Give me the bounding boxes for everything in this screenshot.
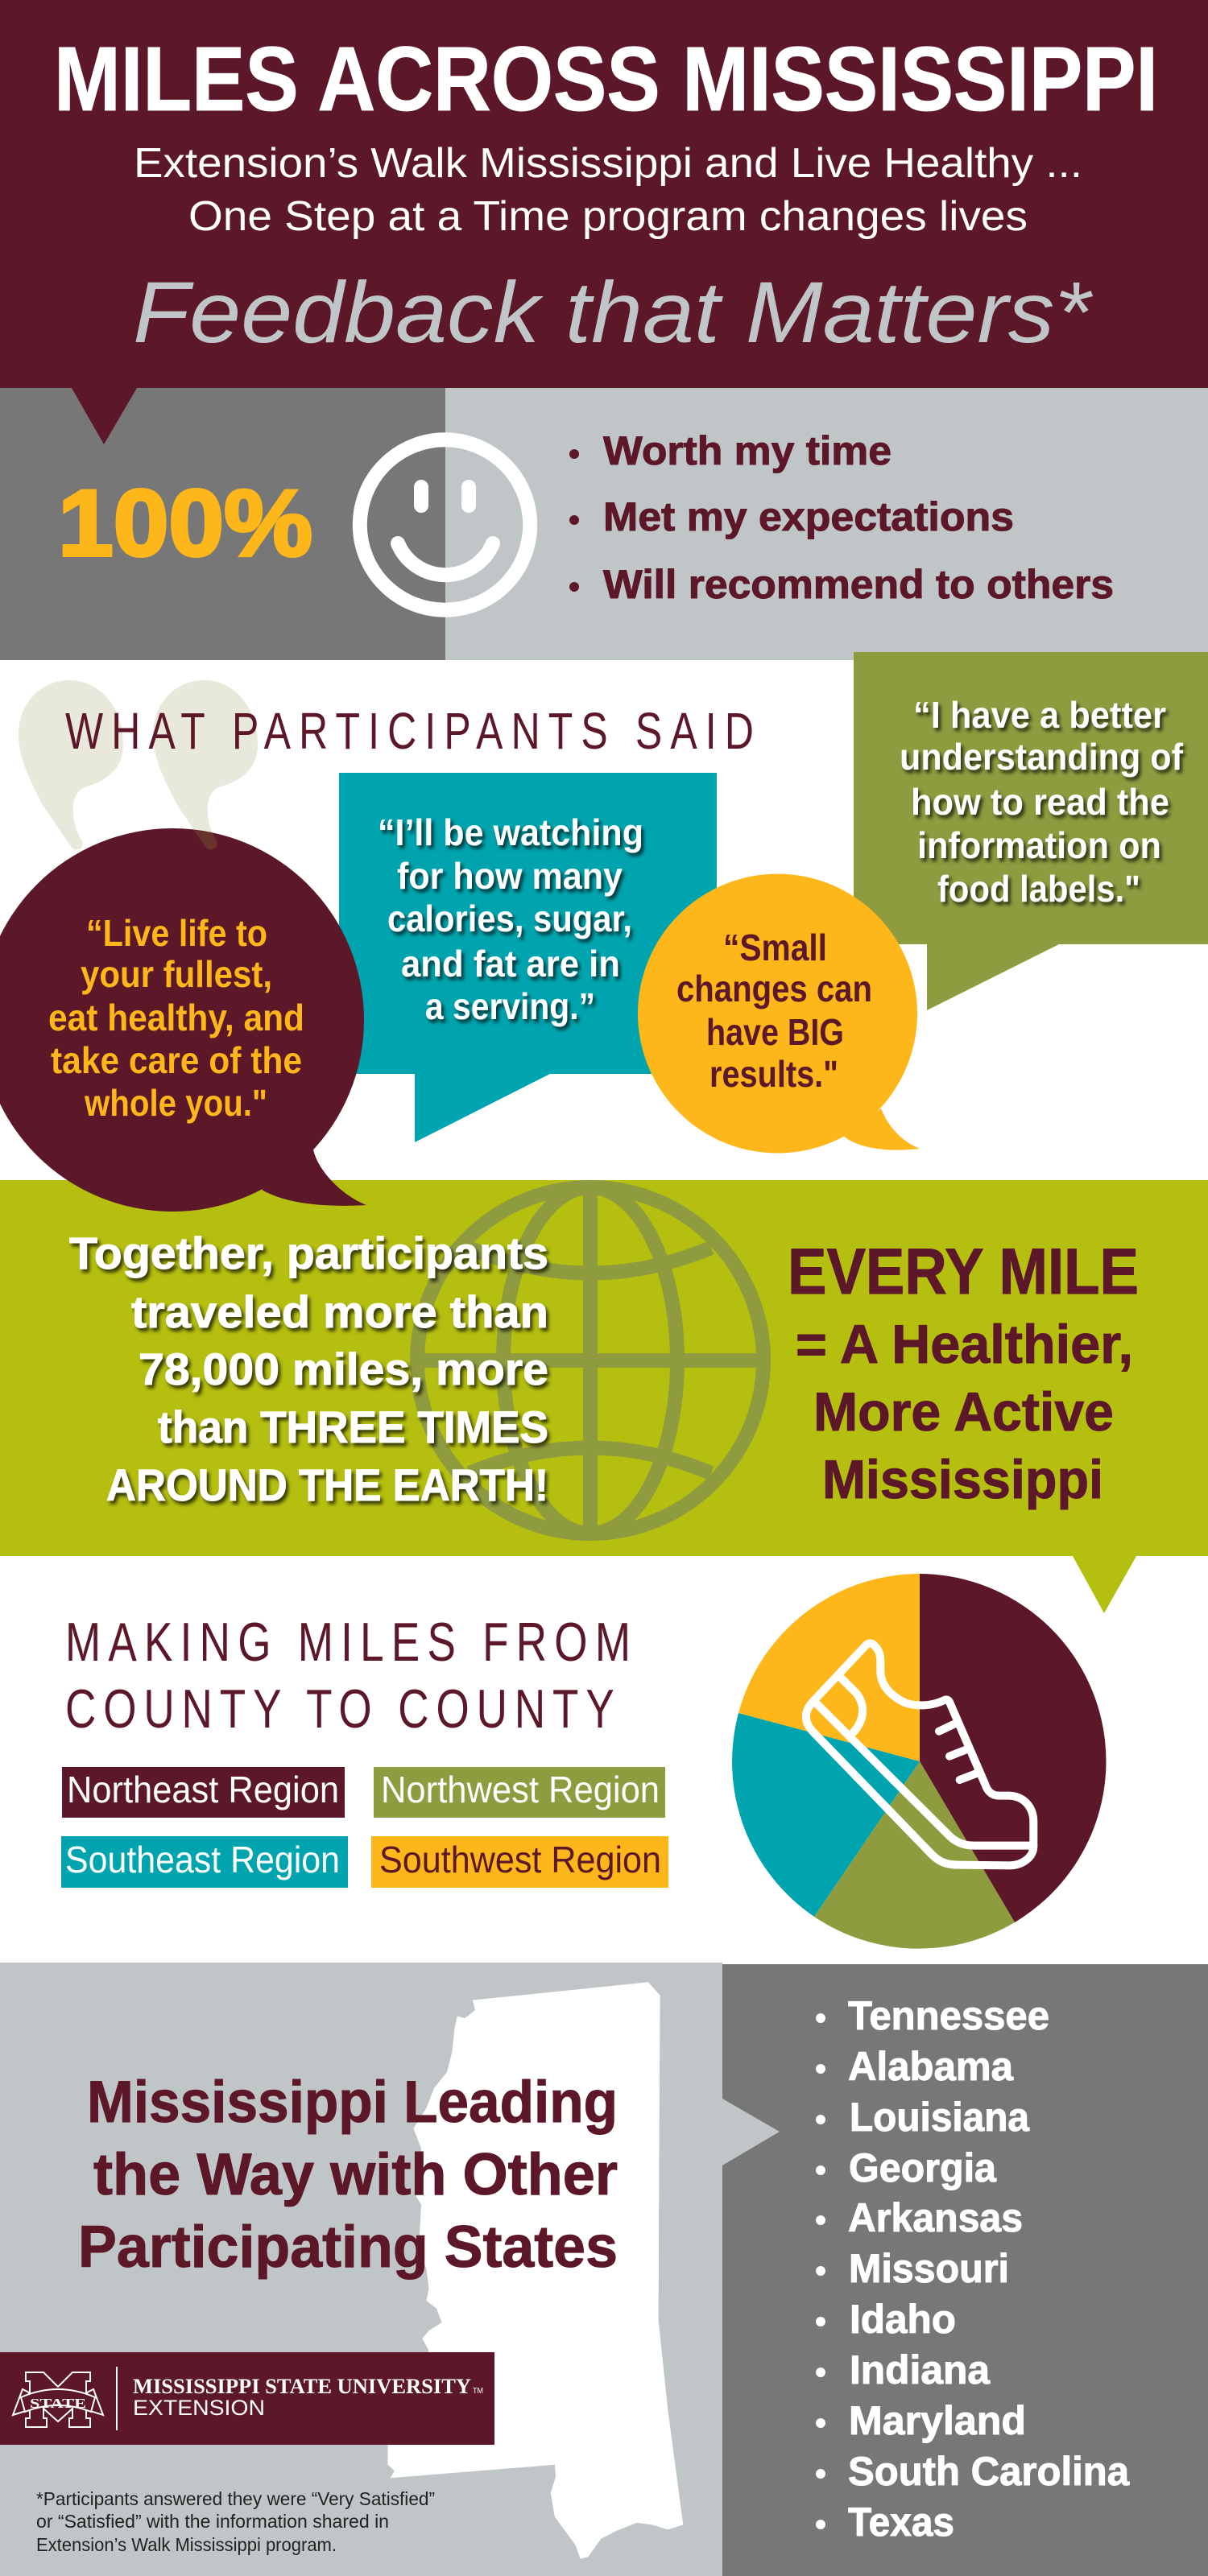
callout: maroon quote: whole you." (84, 1082, 267, 1124)
panel: header (0, 0, 1208, 388)
callout: olive quote (854, 652, 1208, 1010)
panel: green miles band background (0, 1180, 1208, 1556)
arrow: header pointer (72, 388, 137, 444)
heading: leading the way: the Way with Other (93, 2142, 618, 2207)
logo: Mississippi State University Extension: TM (473, 2387, 483, 2396)
heading: making miles (65, 1612, 631, 1739)
panel: satisfaction band (0, 388, 1208, 660)
list: participating states: Tennessee (848, 1993, 1049, 2038)
icon: quotation marks (19, 680, 258, 849)
heading: making miles: COUNTY TO COUNTY (65, 1678, 614, 1739)
subtitle: Extension’s Walk Mississippi and Live Healthy ... (134, 140, 1082, 187)
icon: running shoe (806, 1643, 1033, 1865)
panel: miles band content (69, 1187, 1139, 1613)
logo: Mississippi State University Extension: MISSISSIPPI STATE UNIVERSITY (133, 2375, 471, 2398)
callout: yellow quote: have BIG (706, 1011, 844, 1053)
callout: teal quote (339, 773, 717, 1142)
footnote: Extension’s Walk Mississippi program. (36, 2534, 337, 2555)
callout: yellow quote: changes can (676, 968, 872, 1009)
subtitle: One Step at a Time program changes lives (188, 193, 1028, 240)
text block: every mile: EVERY MILE (788, 1236, 1139, 1308)
list: participating states: South Carolina (848, 2449, 1130, 2494)
logo: Mississippi State University Extension: STATE (30, 2396, 86, 2411)
map: Mississippi outline (388, 1982, 683, 2559)
text block: miles traveled: Together, participants (69, 1228, 548, 1278)
icon: smiley face (360, 440, 530, 610)
list: participating states: Maryland (849, 2398, 1026, 2443)
callout: teal quote: “I’ll be watching (378, 811, 643, 853)
list: participating states: Indiana (850, 2347, 991, 2392)
arrow: states pointer (722, 2099, 780, 2165)
text block: every mile: = A Healthier, (796, 1314, 1133, 1375)
list: participating states: Arkansas (848, 2195, 1023, 2240)
icon: M state mark (13, 2372, 103, 2427)
pie chart: regions (732, 1574, 1106, 1949)
text block: miles traveled (69, 1228, 548, 1510)
callout: olive quote: food labels." (937, 868, 1140, 910)
list: participating states: Idaho (850, 2297, 956, 2342)
text block: miles traveled: traveled more than (131, 1286, 548, 1337)
list: satisfaction points (569, 428, 1114, 607)
callout: teal quote: calories, sugar, (387, 898, 632, 939)
text block: miles traveled: 78,000 miles, more (139, 1344, 548, 1394)
panel: participating states (0, 1963, 1208, 2576)
heading: feedback that matters: Feedback that Matters* (133, 263, 1093, 361)
callout: olive quote: “I have a better (913, 694, 1166, 736)
list: satisfaction points: Met my expectations (603, 494, 1014, 539)
callout: yellow quote: “Small (723, 927, 827, 968)
callout: yellow quote (638, 874, 920, 1153)
callout: olive quote: information on (917, 824, 1161, 866)
list: participating states: Georgia (849, 2145, 997, 2190)
heading: leading the way: Participating States (78, 2215, 618, 2280)
callout: maroon quote: your fullest, (81, 953, 272, 995)
callout: maroon quote: “Live life to (86, 912, 267, 954)
legend: regions: Southwest Region (379, 1839, 661, 1880)
callout: teal quote: a serving.” (425, 985, 595, 1027)
text block: every mile: More Active (813, 1381, 1114, 1443)
legend: regions: Northwest Region (381, 1769, 660, 1810)
legend: regions: Southeast Region (65, 1839, 340, 1880)
footnote: or “Satisfied” with the information shared in (36, 2511, 389, 2532)
text block: every mile: Mississippi (822, 1449, 1103, 1510)
list: participating states: Texas (848, 2500, 954, 2545)
list: satisfaction points: Will recommend to others (603, 562, 1114, 607)
callout: maroon quote: eat healthy, and (48, 997, 304, 1038)
legend: regions (61, 1767, 668, 1888)
callout: teal quote: for how many (397, 855, 623, 897)
text block: miles traveled: AROUND THE EARTH! (106, 1459, 548, 1510)
text block: every mile (788, 1236, 1139, 1510)
callout: teal quote: and fat are in (401, 943, 620, 985)
callout: olive quote: understanding of (900, 736, 1184, 778)
stat: 100%: 100% (58, 470, 312, 576)
callout: olive quote: how to read the (911, 781, 1169, 823)
heading: leading the way: Mississippi Leading (87, 2070, 618, 2135)
subtitle (134, 140, 1082, 240)
list: participating states: Missouri (849, 2246, 1009, 2291)
legend: regions: Northeast Region (67, 1769, 339, 1810)
panel: what participants said (0, 652, 1208, 1212)
logo: Mississippi State University Extension: EXTENSION (133, 2396, 265, 2420)
heading: leading the way (78, 2070, 618, 2280)
list: participating states: Louisiana (850, 2095, 1030, 2140)
callout: maroon quote (0, 828, 366, 1212)
logo: Mississippi State University Extension (0, 2352, 494, 2445)
footnote: *Participants answered they were “Very Satisfied” (36, 2488, 435, 2509)
arrow: green band pointer (1073, 1556, 1136, 1613)
list: participating states (816, 1993, 1130, 2545)
heading: what participants said: WHAT PARTICIPANTS SAID (65, 703, 754, 760)
list: participating states: Alabama (848, 2044, 1014, 2089)
callout: yellow quote: results." (709, 1053, 838, 1095)
heading: making miles: MAKING MILES FROM (65, 1612, 631, 1672)
text block: miles traveled: than THREE TIMES (158, 1402, 548, 1452)
callout: maroon quote: take care of the (51, 1039, 302, 1081)
list: satisfaction points: Worth my time (603, 428, 892, 473)
icon: globe (417, 1187, 763, 1534)
footnote (36, 2488, 435, 2555)
panel: county to county (61, 1574, 1106, 1949)
